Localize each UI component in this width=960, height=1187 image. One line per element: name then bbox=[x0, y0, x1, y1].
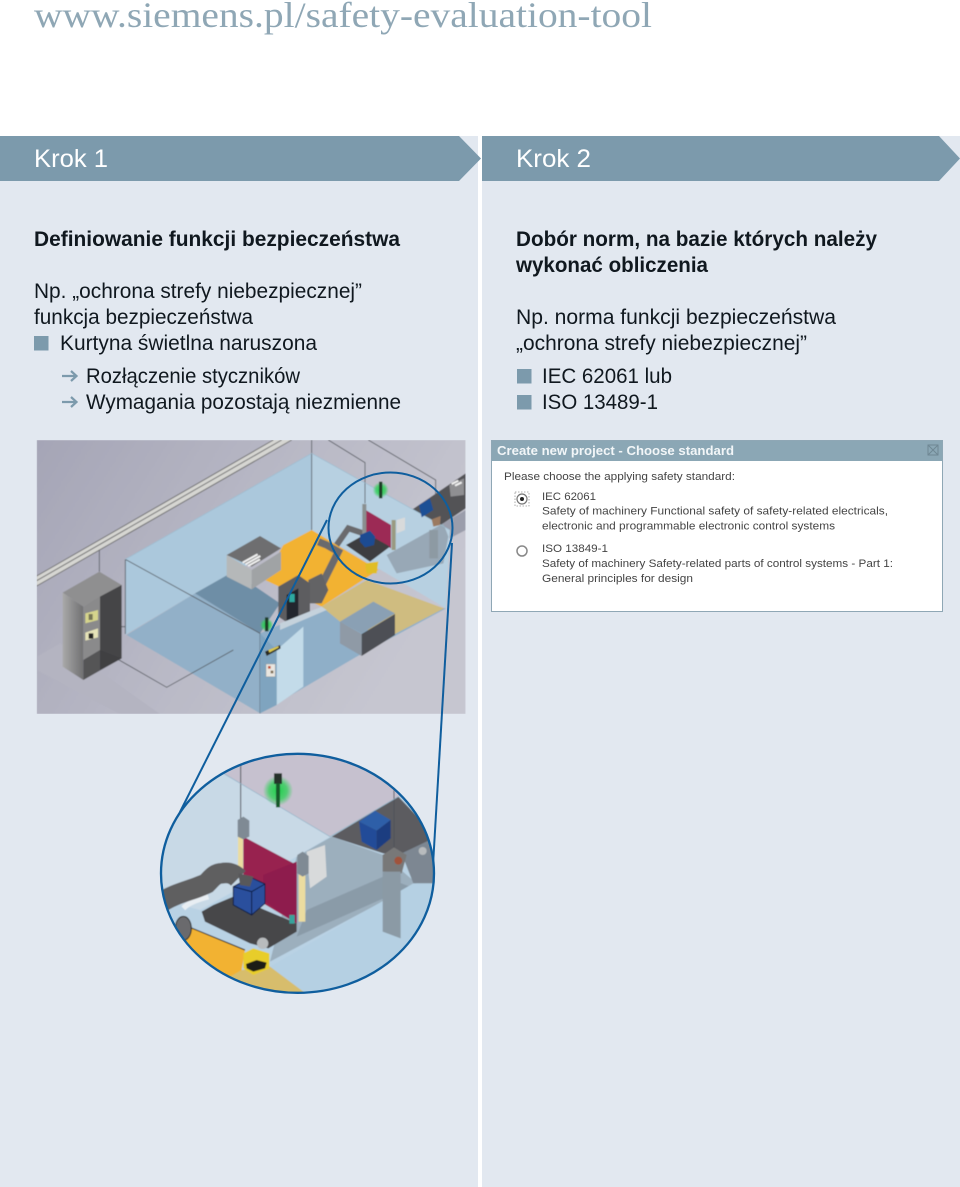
dialog: choose standard: ISO 13849-1 bbox=[542, 543, 608, 555]
door lock bbox=[265, 645, 281, 656]
text block: step 1: Np. „ochrona strefy niebezpiecznej” bbox=[34, 280, 362, 303]
text block: step 1: funkcja bezpieczeństwa bbox=[34, 306, 253, 329]
green beacon top bbox=[373, 482, 389, 498]
floor zones bbox=[127, 530, 446, 713]
green beacon bbox=[260, 617, 273, 632]
back glass wall bbox=[125, 453, 312, 635]
illustration: safety zone overview bbox=[37, 440, 466, 714]
back floor bbox=[225, 755, 400, 836]
connector lines from zoom circle bbox=[180, 520, 452, 865]
text block: step 2: Dobór norm, na bazie których należy bbox=[516, 228, 877, 251]
header arrow: Krok 2: Krok 2 bbox=[516, 145, 591, 173]
right glass wall bbox=[312, 453, 450, 608]
cabinet bbox=[63, 572, 122, 680]
sensor column bbox=[383, 847, 427, 938]
yellow sensor bbox=[243, 948, 269, 975]
text block: step 2: ISO 13489-1 bbox=[542, 391, 658, 414]
fence lines bbox=[99, 440, 436, 713]
dialog: choose standard: Safety of machinery Functional safety of safety-related electricals, bbox=[542, 506, 888, 518]
lower glass floor bbox=[400, 882, 416, 892]
light curtain bbox=[238, 817, 309, 923]
dialog: choose standard bbox=[492, 440, 942, 612]
conveyor back bbox=[332, 797, 437, 855]
zoom circle marker bbox=[328, 472, 452, 584]
dialog: choose standard: IEC 62061 bbox=[542, 491, 596, 503]
text block: step 2: wykonać obliczenia bbox=[515, 254, 708, 277]
header arrow: Krok 2 bbox=[482, 136, 960, 181]
header arrow: Krok 1 bbox=[0, 136, 481, 181]
rail bbox=[37, 440, 292, 586]
conveyor items bbox=[419, 478, 464, 527]
text block: step 1: Kurtyna świetlna naruszona bbox=[60, 332, 317, 355]
dialog: choose standard: General principles for design bbox=[542, 573, 693, 585]
control box bbox=[266, 664, 275, 677]
panel: step 1 background bbox=[0, 136, 478, 1187]
robot arm bbox=[160, 873, 253, 940]
carried box bbox=[233, 877, 265, 915]
robot base and arm bbox=[278, 528, 363, 623]
orange floor bbox=[186, 928, 246, 976]
bin 1 bbox=[227, 536, 281, 589]
conveyor bbox=[412, 473, 466, 525]
text block: step 2: IEC 62061 lub bbox=[542, 365, 672, 388]
dialog: choose standard: Safety of machinery Safety-related parts of control systems - Part 1: bbox=[542, 558, 893, 570]
fence post lines bbox=[240, 766, 395, 819]
bin 2 bbox=[340, 602, 395, 656]
header arrow: Krok 1: Krok 1 bbox=[34, 145, 108, 173]
dialog: choose standard: Create new project - Choose standard bbox=[497, 443, 734, 458]
light blue glass bbox=[150, 773, 330, 910]
text block: step 1: Wymagania pozostają niezmienne bbox=[86, 391, 401, 414]
white ledge bbox=[183, 897, 208, 908]
dialog: choose standard: electronic and programmable electronic control systems bbox=[542, 520, 836, 532]
door bbox=[277, 627, 303, 705]
illustration: enlarged detail bbox=[160, 752, 436, 994]
conveyor belt bbox=[202, 897, 297, 948]
ledge bbox=[280, 607, 327, 630]
beacon bbox=[263, 773, 293, 807]
text block: step 1: Definiowanie funkcji bezpieczeństwa bbox=[34, 228, 400, 251]
text block: step 1: Rozłączenie styczników bbox=[86, 365, 301, 388]
text block: step 2: „ochrona strefy niebezpiecznej” bbox=[516, 332, 807, 355]
box on conveyor bbox=[359, 811, 391, 850]
light curtain zone bbox=[346, 504, 438, 573]
text block: step 1 bbox=[34, 228, 401, 414]
text block: step 2 bbox=[515, 228, 877, 414]
dialog: choose standard: Please choose the applying safety standard: bbox=[504, 471, 735, 483]
text block: step 2: Np. norma funkcji bezpieczeństwa bbox=[516, 306, 836, 329]
panel: step 2 background bbox=[482, 136, 960, 1187]
